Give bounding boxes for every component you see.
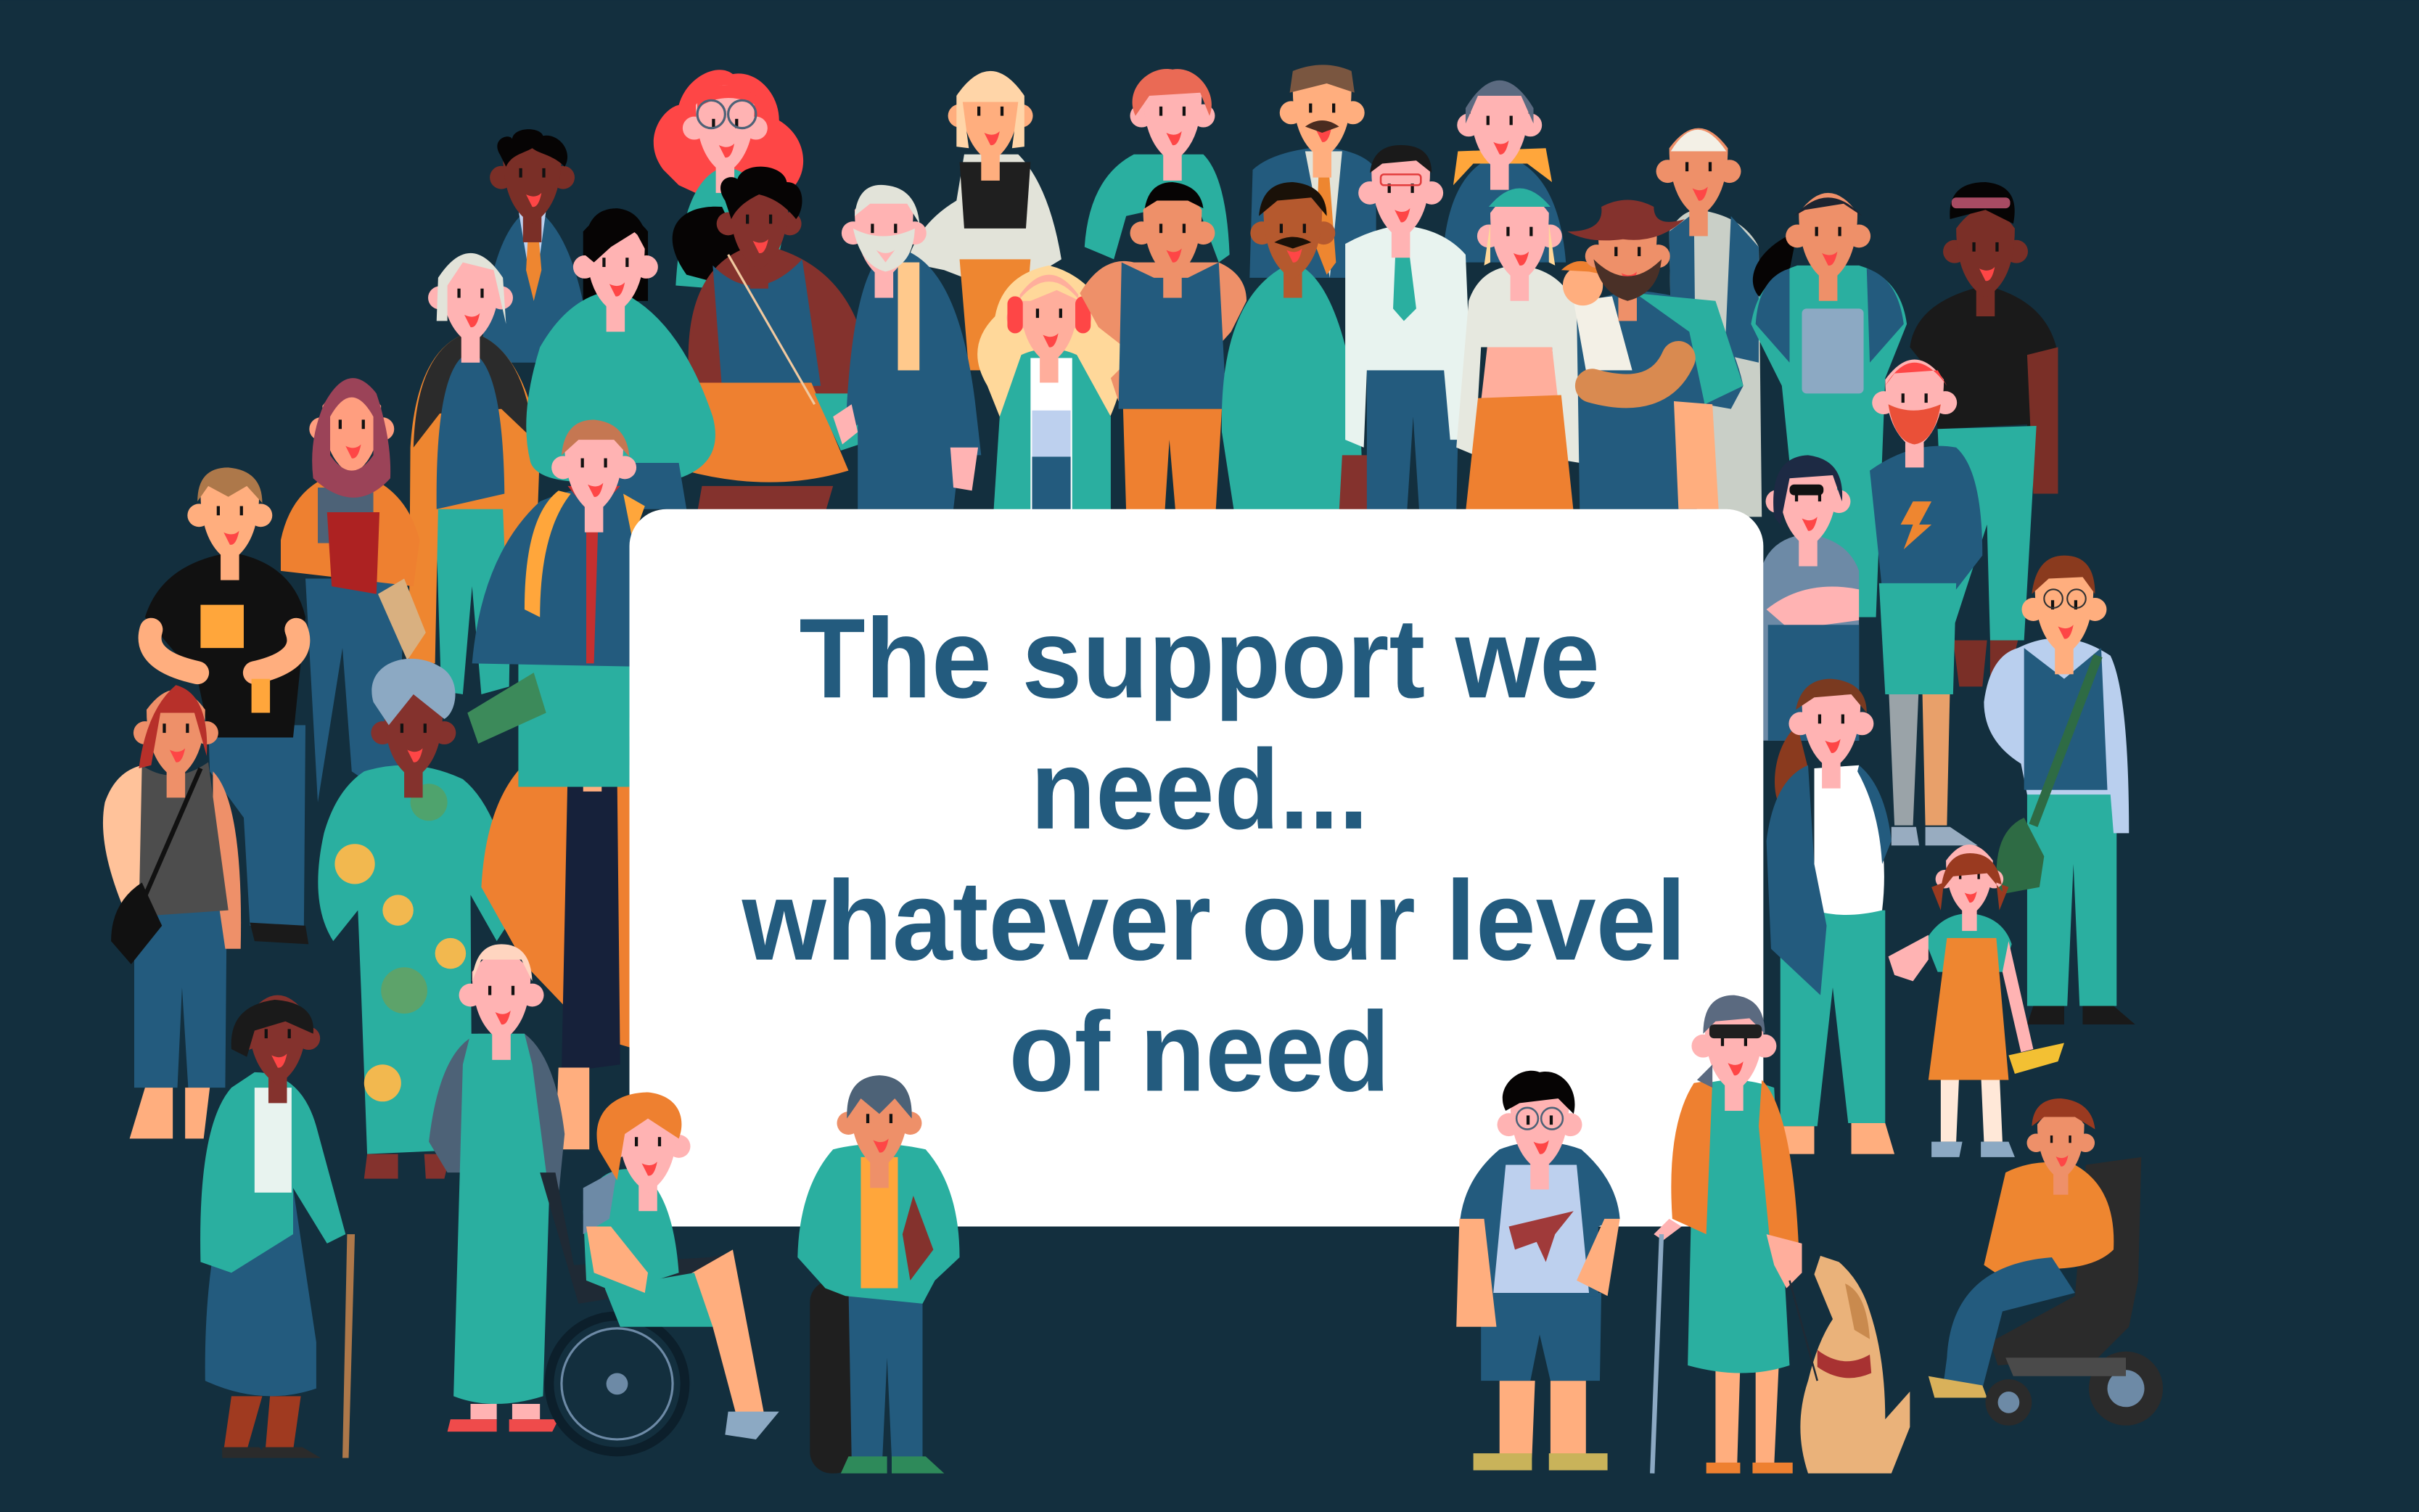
person: old man with white beard in navy coat <box>833 185 981 509</box>
person: woman with red curly hair <box>654 70 803 293</box>
person: woman with orange hair in wheelchair <box>540 1093 779 1452</box>
person: boy with glasses holding toy plane <box>1456 1071 1620 1470</box>
person: woman with headband and black shirt <box>1910 182 2058 686</box>
title: fourth line: of need <box>1009 989 1390 1115</box>
person: older woman with teal cardigan and walking stick <box>200 995 355 1458</box>
person: woman with teal floral dress and grey turban <box>318 659 517 1179</box>
person: woman with sunglasses, teal dress and white cane <box>1652 995 1802 1474</box>
person: man with moustache in teal kurta <box>1222 182 1382 512</box>
white title card <box>630 509 1763 1227</box>
person: woman in mauve headscarf holding books <box>281 378 426 802</box>
title: first line: The support we <box>799 596 1600 722</box>
person: blonde woman with red headphones and green cardigan <box>977 266 1124 512</box>
person: woman in grey vest with red hair and shoulder bag <box>103 685 241 1138</box>
person: woman in orange kimono with black hair <box>481 682 636 1149</box>
person: man with glasses, vest and satchel <box>1984 556 2135 1024</box>
person: grey-haired woman with yellow backpack <box>1442 81 1566 263</box>
person: red-bearded man in navy t-shirt <box>1870 360 1982 845</box>
person: white-haired woman with navy top and orange sleeves <box>408 253 540 694</box>
person: woman with curly black hair, navy vest and orange skirt <box>673 167 873 512</box>
person: man with white cap and vest <box>1656 128 1762 517</box>
person: woman in green hat and crop top with orange trousers <box>1456 189 1580 512</box>
person: tattooed man in navy vest and orange trousers <box>1080 182 1247 512</box>
person: girl in orange pinafore holding toy car <box>1889 845 2064 1157</box>
person: man in navy suit <box>481 129 592 363</box>
person: bald blonde woman with white jacket <box>907 71 1061 370</box>
person: pregnant woman with ponytail <box>1767 679 1894 1154</box>
person: boy in teal hoodie with skateboard <box>797 1075 960 1474</box>
title: second line: need... <box>1030 727 1368 853</box>
person: man in black t-shirt with yellow square <box>145 467 308 944</box>
person: woman with eyepatch and overalls <box>1763 455 1859 741</box>
person: woman with black ponytail and teal vest <box>1751 193 1907 617</box>
icon: guide dog <box>1789 1256 1910 1474</box>
person: woman with black bob in teal hoodie <box>526 208 715 509</box>
person: bearded man in brown hat carrying a child <box>1561 200 1744 512</box>
person: man with green tie, white shirt and glasses <box>1345 145 1474 512</box>
title: third line: whatever our level <box>742 858 1686 985</box>
person: bald woman in teal overalls <box>429 944 564 1431</box>
person: man in orange jumper in power wheelchair <box>1929 1098 2163 1426</box>
person: freckled boy with backpack and green book <box>467 419 645 787</box>
person: man with moustache in navy suit <box>1249 65 1376 278</box>
person: woman with coral hair in teal top <box>1085 69 1230 263</box>
